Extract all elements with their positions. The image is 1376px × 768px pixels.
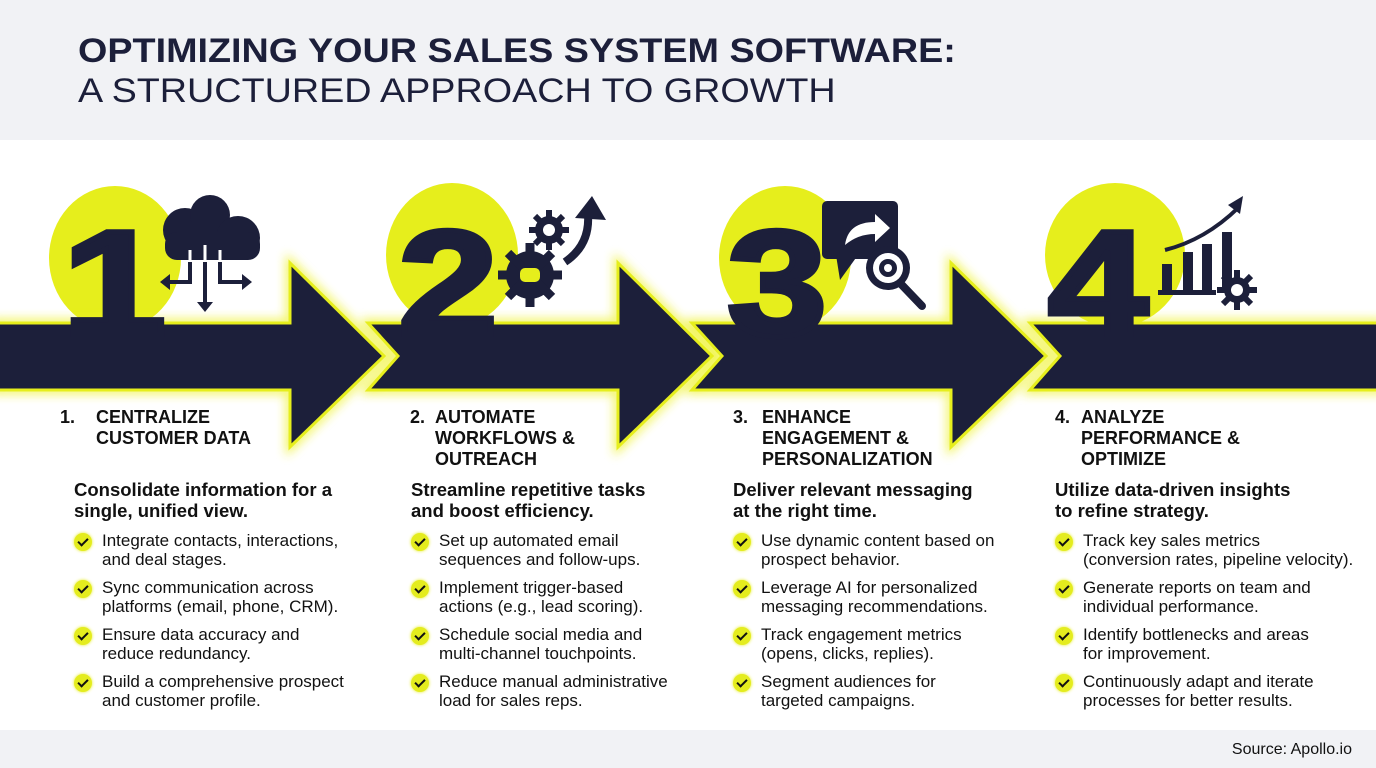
column 4 heading: 4.	[1055, 407, 1070, 427]
column 2 heading: 2.	[410, 407, 425, 427]
column 4 bullets: Track key sales metrics	[1083, 531, 1260, 550]
column 1 bullets: reduce redundancy.	[102, 644, 251, 663]
column 3 bullets: Use dynamic content based on	[761, 531, 994, 550]
arrows	[0, 263, 1376, 447]
column 3 summary: at the right time.	[733, 500, 877, 521]
icon: cloud data	[160, 195, 260, 312]
yellow circles	[49, 183, 1185, 330]
column 2 bullets: Implement trigger-based	[439, 578, 623, 597]
column 1 heading: CENTRALIZE	[96, 407, 210, 427]
column 2 bullets: Reduce manual administrative	[439, 672, 668, 691]
column 3 heading: ENGAGEMENT &	[762, 428, 909, 448]
column 4 bullets: for improvement.	[1083, 644, 1211, 663]
column 4 bullets: Identify bottlenecks and areas	[1083, 625, 1309, 644]
column 2 summary	[411, 479, 645, 521]
column 3 bullets: targeted campaigns.	[761, 691, 915, 710]
column 1 heading: CUSTOMER DATA	[96, 428, 251, 448]
column 2 heading	[410, 407, 575, 469]
column 1 summary: Consolidate information for a	[74, 479, 332, 500]
big numbers: 1	[62, 199, 166, 367]
column 1 bullets: Build a comprehensive prospect	[102, 672, 344, 691]
process arrows graphic	[0, 183, 1376, 460]
column 1 heading: 1.	[60, 407, 75, 427]
column 1 bullets: Integrate contacts, interactions,	[102, 531, 338, 550]
column 1 bullets: and deal stages.	[102, 550, 227, 569]
column 2 summary: and boost efficiency.	[411, 500, 594, 521]
column 4 bullets: processes for better results.	[1083, 691, 1293, 710]
column 1 summary: single, unified view.	[74, 500, 248, 521]
column 3 bullets: Leverage AI for personalized	[761, 578, 977, 597]
column 1 bullets	[72, 530, 344, 710]
icon: growth chart	[1158, 196, 1257, 310]
column 3 bullets: Track engagement metrics	[761, 625, 962, 644]
column 2 bullets: Schedule social media and	[439, 625, 642, 644]
column 2 heading: WORKFLOWS &	[435, 428, 575, 448]
column 4 bullets: Generate reports on team and	[1083, 578, 1311, 597]
column 2 heading: OUTREACH	[435, 449, 537, 469]
column 3 bullets: Segment audiences for	[761, 672, 936, 691]
column 2 bullets: load for sales reps.	[439, 691, 583, 710]
column 3 heading: 3.	[733, 407, 748, 427]
column 4 summary: Utilize data-driven insights	[1055, 479, 1290, 500]
column 4 heading: ANALYZE	[1081, 407, 1164, 427]
column 2 summary: Streamline repetitive tasks	[411, 479, 645, 500]
arrow glow	[0, 263, 1376, 447]
icon: gears and arrow	[498, 196, 606, 307]
footer band	[0, 730, 1376, 768]
column 4 summary	[1055, 479, 1290, 521]
subtitle: A STRUCTURED APPROACH TO GROWTH	[78, 72, 836, 110]
source note: Source: Apollo.io	[1232, 741, 1352, 758]
big numbers	[62, 199, 1148, 368]
big numbers: 3	[727, 200, 827, 368]
column 1 bullets: and customer profile.	[102, 691, 261, 710]
column 3 heading: PERSONALIZATION	[762, 449, 933, 469]
column 4 heading: OPTIMIZE	[1081, 449, 1166, 469]
column 2 bullets: Set up automated email	[439, 531, 619, 550]
column 3 bullets: messaging recommendations.	[761, 597, 988, 616]
column 2 bullets	[408, 530, 668, 710]
column 3 heading	[733, 407, 933, 469]
column 4 summary: to refine strategy.	[1055, 500, 1209, 521]
column 2 bullets: sequences and follow-ups.	[439, 550, 640, 569]
title: OPTIMIZING YOUR SALES SYSTEM SOFTWARE:	[78, 32, 956, 70]
column 3 summary: Deliver relevant messaging	[733, 479, 973, 500]
column 4 bullets: (conversion rates, pipeline velocity).	[1083, 550, 1353, 569]
column 4 heading: PERFORMANCE &	[1081, 428, 1240, 448]
header band	[0, 0, 1376, 140]
column 1 summary	[74, 479, 332, 521]
column 1 bullets: platforms (email, phone, CRM).	[102, 597, 338, 616]
column 3 summary	[733, 479, 973, 521]
big numbers: 4	[1048, 200, 1148, 368]
column 4 bullets: individual performance.	[1083, 597, 1259, 616]
column 1 bullets: Ensure data accuracy and	[102, 625, 300, 644]
column 2 bullets: actions (e.g., lead scoring).	[439, 597, 643, 616]
column 2 bullets: multi-channel touchpoints.	[439, 644, 637, 663]
big numbers: 2	[398, 200, 498, 368]
column 3 bullets: prospect behavior.	[761, 550, 900, 569]
column 4 bullets	[1052, 530, 1353, 710]
column 1 bullets: Sync communication across	[102, 578, 314, 597]
column 4 bullets: Continuously adapt and iterate	[1083, 672, 1314, 691]
column 1 heading	[60, 407, 251, 448]
column 4 heading	[1055, 407, 1240, 469]
icon: message and target	[822, 201, 922, 306]
column 2 heading: AUTOMATE	[435, 407, 535, 427]
column 3 heading: ENHANCE	[762, 407, 851, 427]
column 3 bullets: (opens, clicks, replies).	[761, 644, 934, 663]
column 3 bullets	[730, 530, 994, 710]
